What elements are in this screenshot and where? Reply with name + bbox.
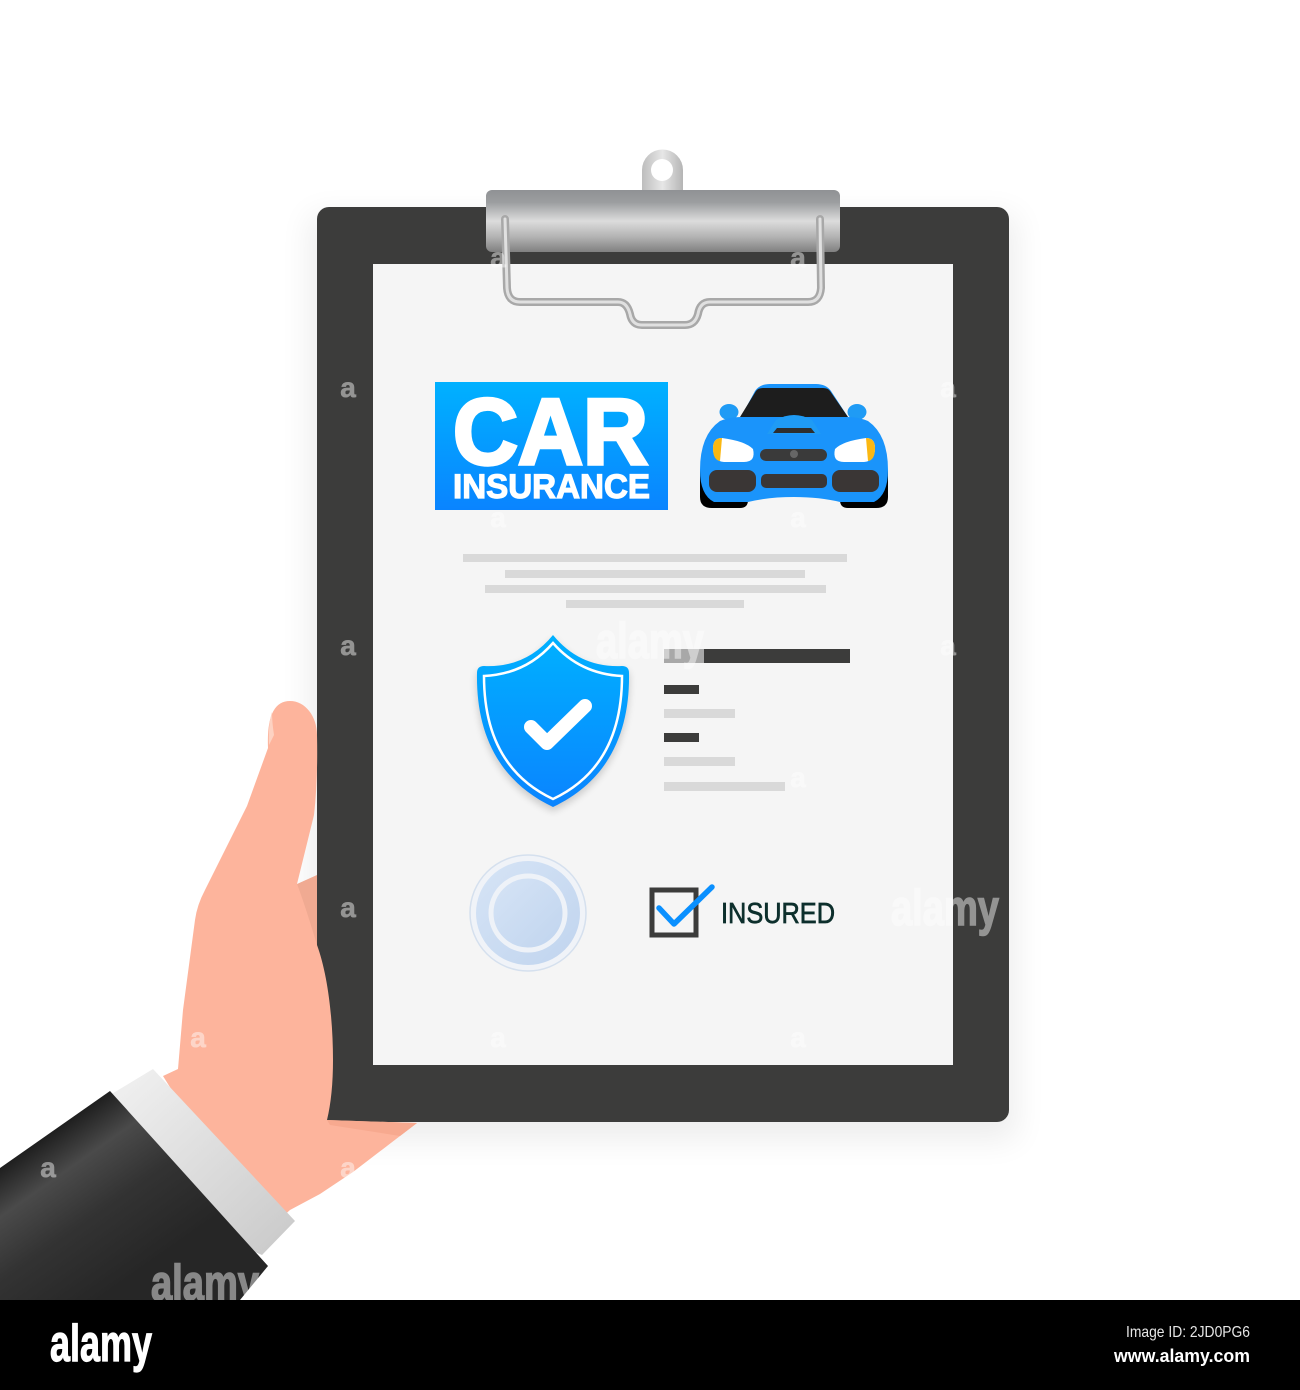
watermark glyphs: a	[790, 762, 806, 793]
watermark glyphs: a	[940, 372, 956, 403]
watermark glyphs	[40, 242, 999, 1311]
metal clip	[486, 150, 840, 325]
hand holding clipboard	[163, 701, 417, 1235]
watermark glyphs: a	[340, 1152, 356, 1183]
seal stamp	[470, 855, 586, 971]
paper sheet	[373, 264, 953, 1065]
watermark glyphs: a	[340, 372, 356, 403]
watermark glyphs: a	[790, 1022, 806, 1053]
watermark glyphs: a	[790, 242, 806, 273]
footer bar: alamy	[50, 1315, 152, 1373]
title badge: car insurance: CAR	[453, 379, 648, 484]
watermark glyphs: alamy	[151, 1255, 259, 1311]
watermark glyphs: alamy	[891, 880, 999, 936]
shirt cuff	[105, 1069, 295, 1255]
watermark glyphs: a	[490, 1022, 506, 1053]
watermark glyphs: a	[790, 502, 806, 533]
icon: protection shield with check	[477, 635, 629, 811]
footer bar: www.alamy.com	[1113, 1346, 1250, 1366]
footer bar	[0, 1300, 1300, 1390]
watermark glyphs: a	[190, 1022, 206, 1053]
insured checkbox: INSURED	[721, 898, 835, 930]
text block placeholder lines	[463, 554, 847, 608]
watermark glyphs: a	[340, 630, 356, 661]
watermark glyphs: a	[940, 630, 956, 661]
watermark glyphs: a	[490, 502, 506, 533]
suit sleeve	[0, 1091, 268, 1300]
details lines	[664, 649, 850, 791]
watermark glyphs: a	[490, 242, 506, 273]
watermark glyphs: a	[340, 892, 356, 923]
footer bar: Image ID: 2JD0PG6	[1126, 1324, 1250, 1341]
title badge: car insurance: INSURANCE	[453, 468, 650, 506]
watermark glyphs: a	[40, 1152, 56, 1183]
clipboard board	[317, 207, 1009, 1122]
insured checkbox	[652, 887, 835, 935]
watermark glyphs: alamy	[596, 613, 704, 669]
icon: blue car front	[700, 384, 888, 508]
